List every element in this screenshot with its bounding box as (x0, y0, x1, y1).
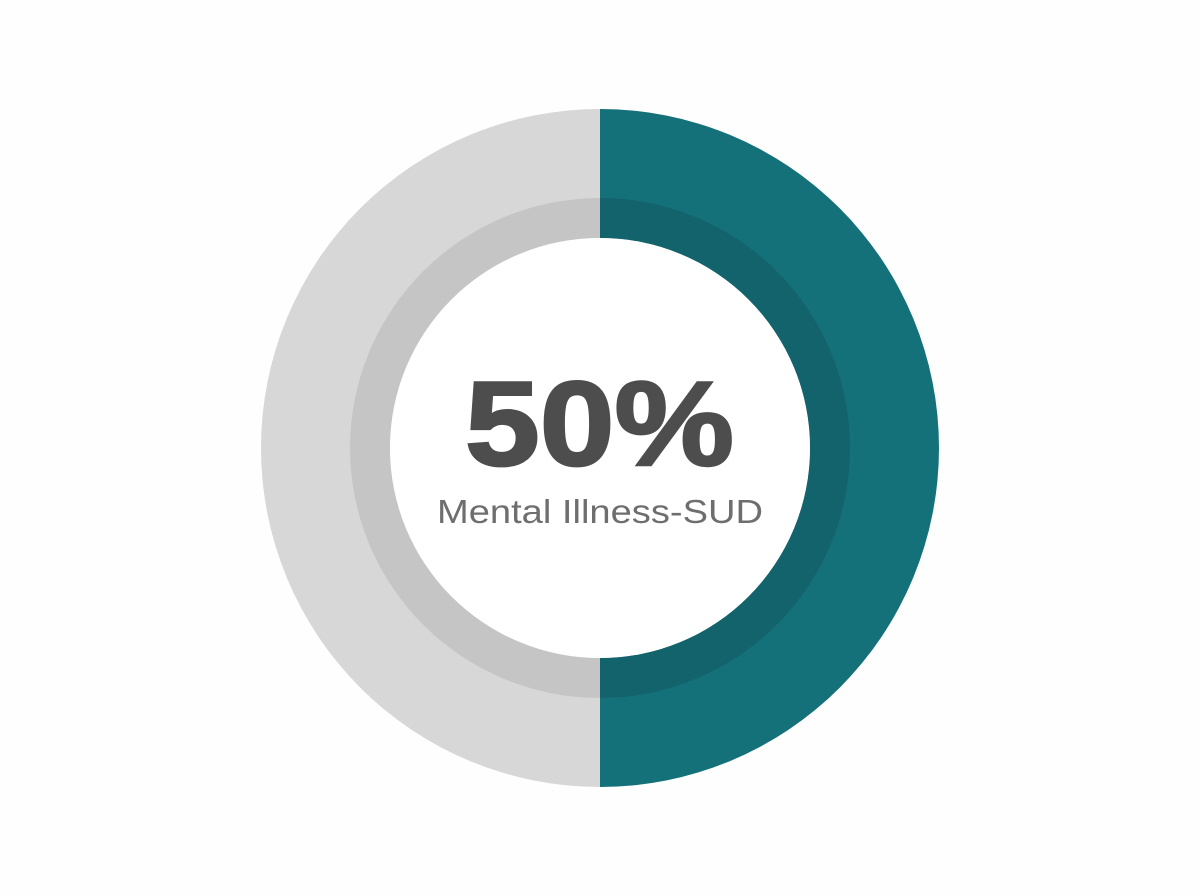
inner ring: darker grey half (350, 198, 600, 698)
center white circle (390, 238, 810, 658)
outer ring: teal half (600, 109, 939, 787)
percentage value: 50% (465, 357, 734, 491)
outer ring: remaining grey half (261, 109, 600, 787)
inner ring: darker teal half (600, 198, 850, 698)
caption: Mental Illness-SUD (437, 493, 763, 530)
